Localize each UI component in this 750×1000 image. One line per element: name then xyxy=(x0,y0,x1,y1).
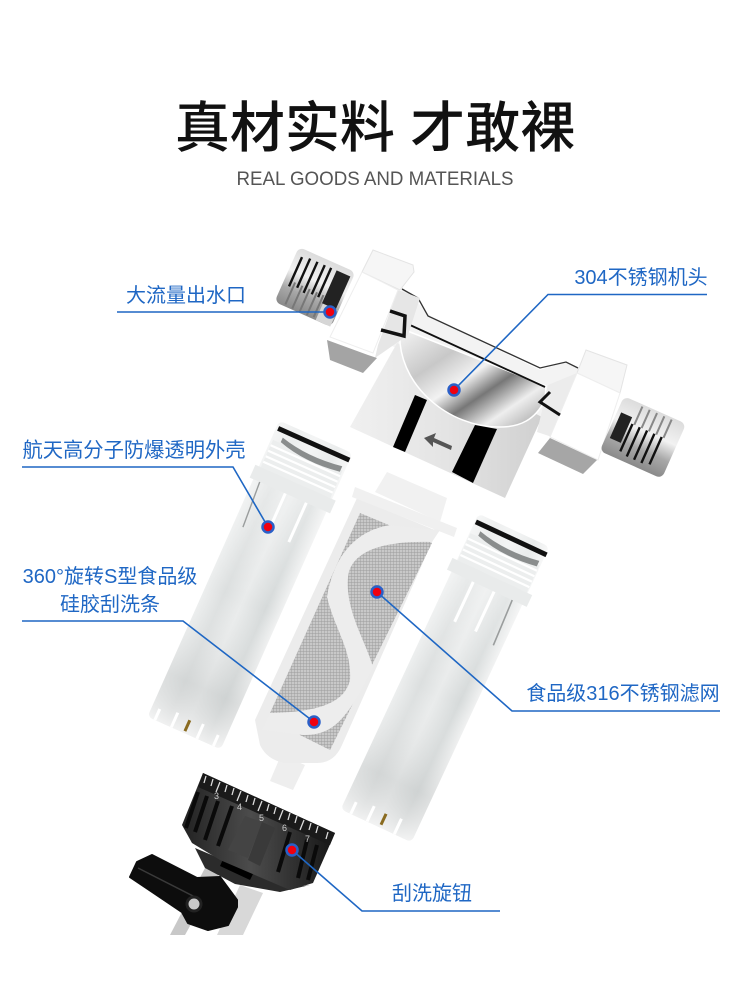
callout: shell: 航天高分子防爆透明外壳 xyxy=(22,439,246,462)
s-shaped scraper band xyxy=(262,525,440,735)
callout: scraper strip: 硅胶刮洗条 xyxy=(60,593,160,616)
scale numbers: 3 xyxy=(214,791,219,801)
chrome cup xyxy=(400,328,546,427)
black bars xyxy=(393,395,427,452)
knob body xyxy=(182,773,335,890)
o-ring xyxy=(475,520,548,557)
lower cap xyxy=(195,848,310,892)
product: stainless steel head xyxy=(274,247,686,498)
product: right transparent shell xyxy=(336,512,554,844)
right nut xyxy=(577,350,627,393)
product: left transparent shell xyxy=(144,419,356,751)
callout: scraping knob xyxy=(286,844,500,911)
handle xyxy=(130,855,237,930)
support rods xyxy=(170,868,220,935)
scale numbers: 4 xyxy=(237,802,242,812)
product: filter cartridge xyxy=(255,472,457,790)
flange xyxy=(352,487,457,537)
scale ticks xyxy=(204,776,328,839)
pipe body xyxy=(390,287,580,420)
scale numbers: 5 xyxy=(259,813,264,823)
callout: 316 filter mesh: 食品级316不锈钢滤网 xyxy=(526,682,720,705)
callout: scraping knob: 刮洗旋钮 xyxy=(392,882,472,905)
screw xyxy=(187,897,201,911)
scale numbers: 6 xyxy=(282,823,287,833)
callout: 304 stainless head xyxy=(448,266,708,396)
callout: large flow outlet: 大流量出水口 xyxy=(126,284,246,307)
callout: scraper strip xyxy=(22,565,320,728)
callout: scraper strip: 360°旋转S型食品级 xyxy=(23,565,197,588)
dark joint line xyxy=(410,325,545,387)
filter frame xyxy=(255,498,437,763)
product: scraping knob xyxy=(130,773,335,935)
subtitle: REAL GOODS AND MATERIALS xyxy=(236,168,514,190)
flow arrow xyxy=(424,433,452,450)
stem xyxy=(270,755,305,790)
scale numbers: 7 xyxy=(305,834,310,844)
callout: 304 stainless head: 304不锈钢机头 xyxy=(574,266,708,289)
filter mesh xyxy=(270,513,432,750)
left thread xyxy=(274,247,356,327)
title: 真材实料 才敢裸 xyxy=(175,97,575,159)
left collar xyxy=(375,290,420,358)
flat grip panels xyxy=(228,816,262,858)
scale numbers xyxy=(214,791,310,844)
callout: shell xyxy=(22,439,274,532)
callout: 316 filter mesh xyxy=(372,586,720,711)
housing xyxy=(350,343,542,498)
callout: large flow outlet xyxy=(117,284,336,318)
left nut xyxy=(362,250,414,290)
cap xyxy=(375,472,447,522)
right thread xyxy=(600,396,686,479)
o-ring xyxy=(277,426,350,462)
